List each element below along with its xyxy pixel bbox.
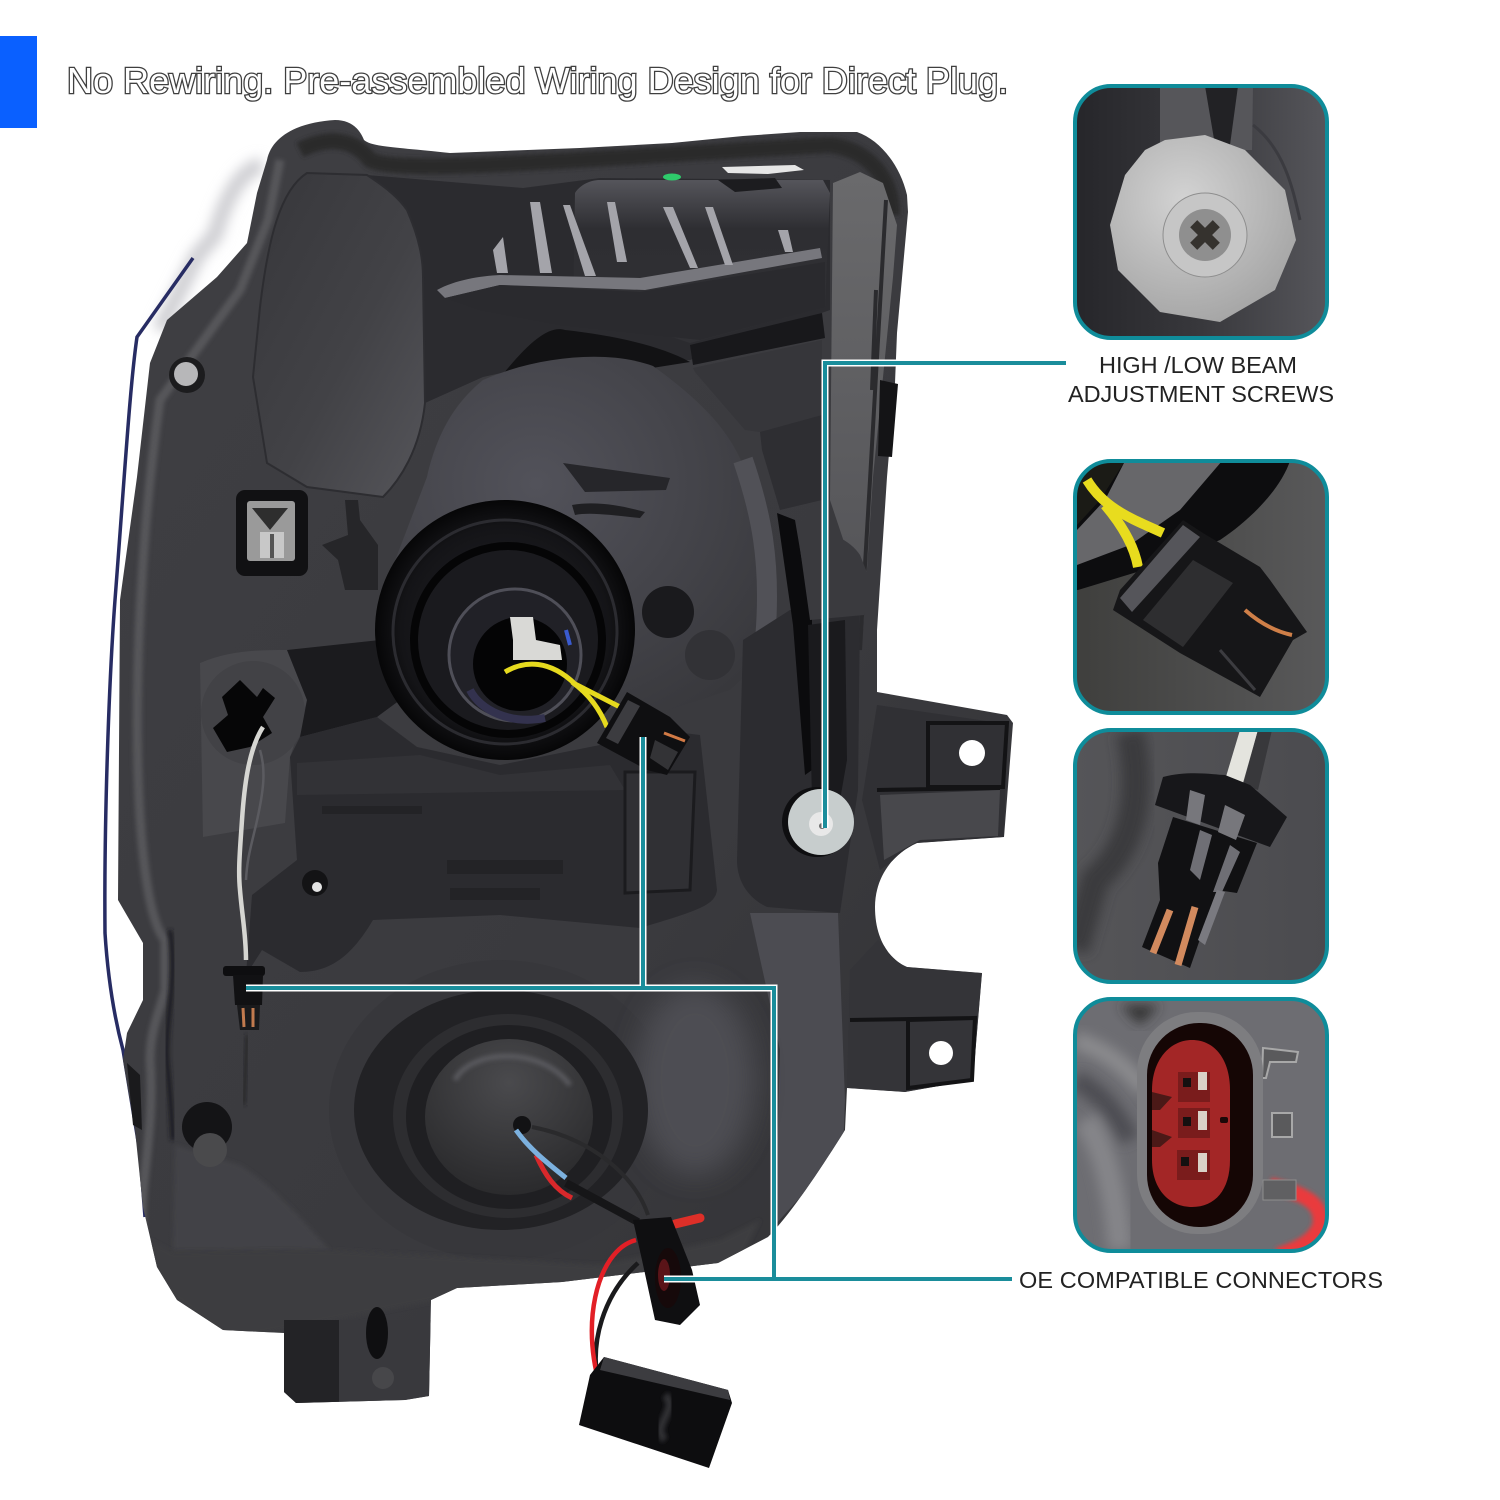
stud head (174, 362, 198, 386)
cross vent hole (213, 680, 275, 752)
housing body (118, 120, 1013, 1403)
white sticker (722, 165, 804, 174)
text: high/low beam label: ADJUSTMENT SCREWS (1068, 381, 1334, 407)
white wire (239, 727, 263, 960)
bracket dot (372, 1367, 394, 1389)
right ear lower frame (850, 1018, 975, 1088)
blue lens edge (105, 258, 193, 1217)
chrome lens haze (160, 165, 262, 330)
bracket slot (366, 1307, 388, 1359)
recess upper band (297, 755, 625, 795)
upper hood panel (253, 173, 425, 497)
dome holes (642, 586, 694, 638)
boot wire hole (513, 1116, 531, 1134)
harness wires (592, 1218, 700, 1397)
fog halo (329, 960, 673, 1260)
callout: adjustment screws leader (825, 363, 1066, 828)
center lower recess (246, 717, 717, 975)
clip beside connector (322, 500, 378, 590)
lower strut highlight (750, 913, 845, 1225)
strut (737, 610, 860, 913)
low beam bulb connector (223, 966, 265, 1030)
harness connector (633, 1217, 700, 1325)
black side tab (878, 380, 898, 457)
lower skirt (150, 1227, 752, 1333)
strip edge ridges (860, 200, 886, 650)
shelf shadow next to ear (287, 640, 400, 737)
blue accent bar (0, 36, 37, 128)
dome rim band (743, 460, 767, 640)
mount hole lower (929, 1041, 953, 1065)
panel: OE connector detail (1075, 999, 1327, 1255)
right ear band (880, 790, 1000, 860)
lower body right light (635, 985, 755, 1175)
bracket light ribs (493, 202, 793, 276)
third compartment (760, 415, 822, 510)
text: OE connectors label: OE COMPATIBLE CONNECTORS (1019, 1267, 1383, 1293)
right ear lower (847, 940, 982, 1092)
rectangular emboss frame (625, 772, 695, 893)
adjuster arm (808, 620, 847, 800)
lower left panel (177, 1149, 323, 1246)
small stud (302, 870, 328, 896)
right ear upper frame (877, 723, 1007, 790)
mount hole upper (959, 740, 985, 766)
headlight assembly (105, 120, 1013, 1468)
panel: high beam connector detail (1075, 461, 1327, 713)
right inner strip (830, 172, 897, 572)
top left stud (169, 357, 205, 393)
callout: connectors leader (246, 737, 1012, 1279)
fog lamp wires (516, 1127, 648, 1222)
second compartment panel (693, 340, 822, 432)
bracket shade (284, 1320, 339, 1410)
green mark (663, 174, 681, 180)
title: No Rewiring. Pre-assembled Wiring Design for Direct Plug. (67, 60, 1008, 101)
right ear upper (862, 705, 1007, 870)
sticker clip (718, 178, 782, 192)
arc shadow above dome (506, 329, 690, 372)
vertical seam (244, 1035, 247, 1105)
relay module (579, 1357, 732, 1468)
adjuster channel (777, 513, 812, 775)
bracket right (339, 1320, 431, 1410)
dark cavity behind bracket (367, 175, 830, 403)
high beam connector (597, 692, 690, 775)
dome tab (563, 463, 670, 492)
lower left rim ridge (167, 930, 173, 1140)
dome tab lower slit (572, 503, 645, 518)
top shelf lip (437, 248, 822, 298)
dome plug (685, 630, 735, 680)
high beam socket (375, 500, 635, 760)
right lower compartments (690, 313, 825, 365)
lower stud (182, 1102, 232, 1167)
stud pin (312, 882, 322, 892)
panel: adjustment screw detail (1075, 86, 1327, 338)
dark wire (246, 750, 263, 880)
adjustment screw (782, 787, 854, 857)
top rim dark band (300, 141, 892, 215)
yellow wires (505, 664, 620, 727)
embossed text block (322, 806, 563, 900)
ear round boss (201, 661, 305, 765)
top bracket box (574, 180, 830, 222)
lens side clip (127, 1063, 142, 1130)
text: high/low beam label: HIGH /LOW BEAM (1099, 352, 1297, 378)
panel: low beam connector detail (1075, 730, 1327, 982)
small connector top left (236, 490, 308, 576)
adjuster upper cover (797, 527, 870, 620)
shelf underside (445, 262, 825, 340)
left rim highlight (137, 160, 280, 1230)
left ear panel (200, 650, 307, 837)
fog lamp rings (354, 990, 648, 1230)
housing shaded details (137, 141, 1007, 1410)
socket dome (396, 356, 722, 628)
